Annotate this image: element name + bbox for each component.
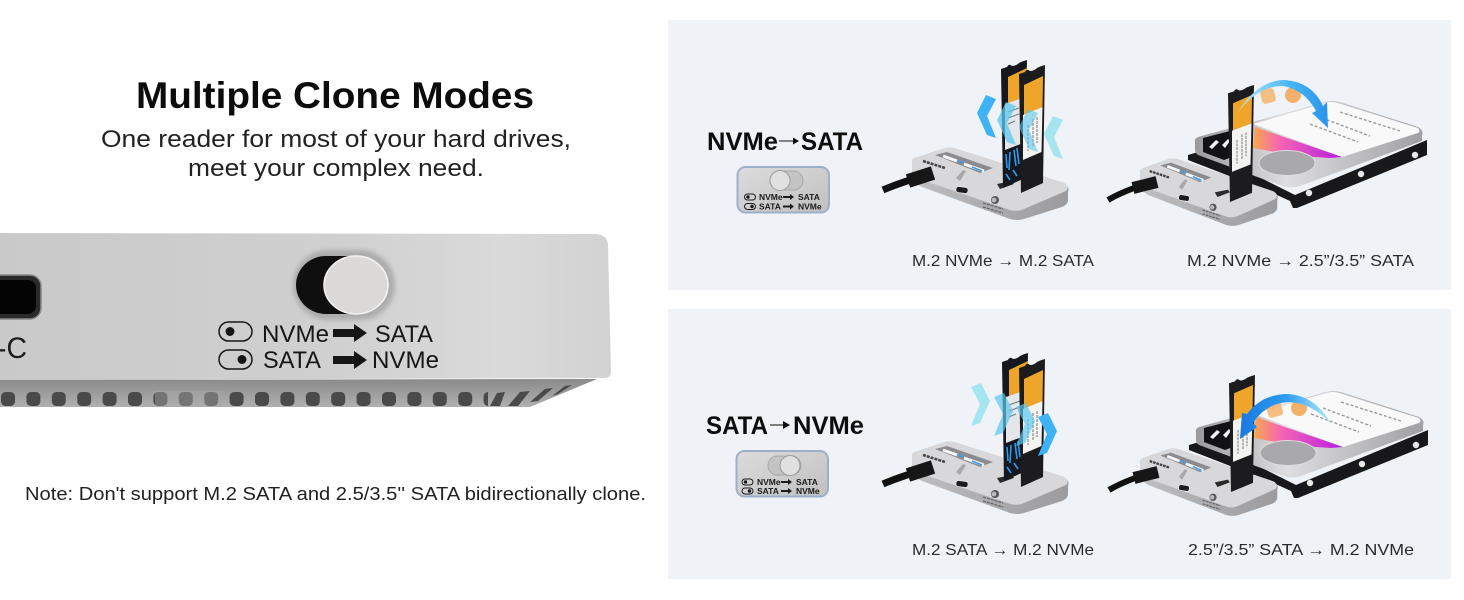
switch badge (738, 167, 829, 212)
switch badge (736, 451, 828, 496)
transfer arrow (1238, 80, 1328, 128)
mode legend: SATA (375, 321, 433, 348)
caption: M.2 NVMe → M.2 SATA (912, 253, 1094, 270)
illustration: dock with two M.2 drives (883, 60, 1068, 220)
illustration: dock with two M.2 drives (883, 353, 1068, 514)
subtitle: meet your complex need. (188, 155, 484, 182)
illustration: dock, M.2 drive and hard disk (1108, 80, 1427, 226)
switch badge: NVMe (757, 477, 781, 487)
transfer arrow (1240, 394, 1331, 439)
product close-up: device edge with slide switch (0, 233, 611, 407)
panel: SATA to NVMe (668, 309, 1451, 579)
heading: SATA (801, 128, 863, 156)
note: Note: Don't support M.2 SATA and 2.5/3.5'' SATA bidirectionally clone. (25, 484, 646, 504)
caption: 2.5”/3.5” SATA → M.2 NVMe (1188, 542, 1414, 559)
mode legend: NVMe (372, 347, 439, 374)
illustration: dock, M.2 drive and hard disk (1109, 375, 1428, 516)
switch badge: SATA (798, 192, 820, 202)
switch badge: SATA (757, 486, 779, 496)
caption: M.2 SATA → M.2 NVMe (912, 542, 1094, 559)
transfer chevrons (971, 383, 1057, 456)
heading (707, 128, 863, 156)
subtitle: One reader for most of your hard drives, (101, 126, 571, 153)
switch badge: NVMe (759, 192, 783, 202)
panel: NVMe to SATA (668, 20, 1451, 290)
heading (706, 412, 864, 440)
switch badge: SATA (759, 202, 781, 212)
USB-C port (0, 275, 41, 319)
heading: NVMe (707, 128, 778, 156)
heading: NVMe (793, 412, 864, 440)
caption: M.2 NVMe → 2.5”/3.5” SATA (1187, 253, 1414, 270)
mode legend: NVMe (262, 321, 329, 348)
mode legend (219, 321, 439, 374)
slide switch (293, 250, 395, 320)
switch badge: NVMe (796, 486, 820, 496)
transfer chevrons (977, 95, 1063, 159)
switch badge: NVMe (798, 202, 822, 212)
switch badge: SATA (796, 477, 818, 487)
mode legend: SATA (263, 347, 321, 374)
heading: SATA (706, 412, 768, 440)
title: Multiple Clone Modes (136, 75, 534, 116)
subtitle (101, 126, 571, 182)
